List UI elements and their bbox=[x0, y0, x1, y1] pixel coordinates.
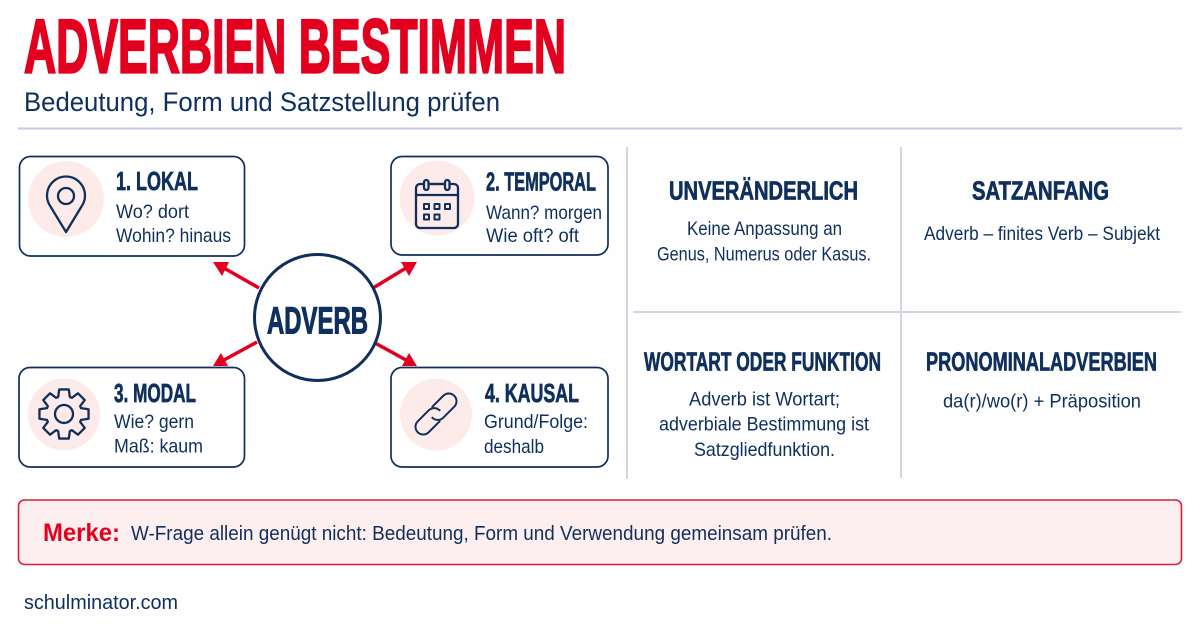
text: Wohin? hinaus: Wohin? hinaus bbox=[116, 225, 231, 247]
text: Satzgliedfunktion.: Satzgliedfunktion. bbox=[694, 439, 835, 461]
text: Adverb ist Wortart;: Adverb ist Wortart; bbox=[689, 388, 840, 410]
icon: map pin bbox=[47, 177, 85, 232]
text: Wie oft? oft: Wie oft? oft bbox=[486, 225, 580, 247]
text: Wann? morgen: Wann? morgen bbox=[486, 202, 602, 224]
label: Merke: Merke: bbox=[43, 519, 120, 547]
text: Wie? gern: Wie? gern bbox=[114, 411, 194, 433]
text: Keine Anpassung an: Keine Anpassung an bbox=[687, 218, 842, 240]
arrow: adverb to kausal bbox=[375, 343, 417, 366]
panel: 2. Temporal bbox=[391, 156, 608, 255]
heading: 4. Kausal: 4. KAUSAL bbox=[485, 378, 579, 408]
panel: Satzanfang: SATZANFANG bbox=[972, 176, 1109, 206]
text: da(r)/wo(r) + Präposition: da(r)/wo(r) + Präposition bbox=[943, 390, 1141, 412]
heading: 1. Lokal: 1. LOKAL bbox=[116, 166, 198, 196]
arrow: adverb to modal bbox=[213, 342, 257, 366]
arrow: adverb to temporal bbox=[373, 262, 417, 288]
callout: Merke bbox=[18, 500, 1182, 564]
arrow: adverb to lokal bbox=[213, 262, 259, 288]
text: adverbiale Bestimmung ist: adverbiale Bestimmung ist bbox=[659, 414, 870, 436]
panel: Pronominaladverbien bbox=[926, 346, 1157, 412]
text: Grund/Folge:: Grund/Folge: bbox=[484, 411, 588, 433]
central node: ADVERB: ADVERB bbox=[267, 300, 368, 342]
panel: 1. Lokal bbox=[20, 156, 244, 256]
panel: 3. Modal bbox=[19, 368, 244, 467]
title: ADVERBIEN BESTIMMEN bbox=[24, 4, 566, 90]
icon: calendar bbox=[416, 180, 458, 228]
text: Genus, Numerus oder Kasus.: Genus, Numerus oder Kasus. bbox=[657, 244, 871, 266]
icon: gear bbox=[39, 389, 89, 439]
subtitle: Bedeutung, Form und Satzstellung prüfen bbox=[24, 87, 500, 117]
text: Wo? dort: Wo? dort bbox=[116, 201, 190, 223]
icon: chain link bbox=[412, 390, 460, 438]
panel: Unveränderlich bbox=[657, 176, 871, 266]
footer: website: schulminator.com bbox=[24, 592, 178, 614]
heading: 2. Temporal: 2. TEMPORAL bbox=[486, 166, 596, 196]
panel: Wortart oder Funktion bbox=[644, 346, 881, 461]
panel: 4. Kausal bbox=[391, 368, 608, 467]
text: Adverb – finites Verb – Subjekt: Adverb – finites Verb – Subjekt bbox=[924, 223, 1161, 245]
panel: Wortart oder Funktion: WORTART ODER FUNKTION bbox=[644, 346, 881, 376]
panel: Unveränderlich: UNVERÄNDERLICH bbox=[669, 176, 858, 206]
text: reminder: W-Frage allein genügt nicht: Bedeutung, Form und Verwendung gemeinsam prüfen. bbox=[131, 523, 832, 545]
panel: Satzanfang bbox=[924, 176, 1161, 245]
text: Maß: kaum: Maß: kaum bbox=[114, 436, 203, 458]
central node: ADVERB bbox=[254, 254, 380, 380]
text: deshalb: deshalb bbox=[484, 436, 544, 458]
heading: 3. Modal: 3. MODAL bbox=[114, 378, 196, 408]
